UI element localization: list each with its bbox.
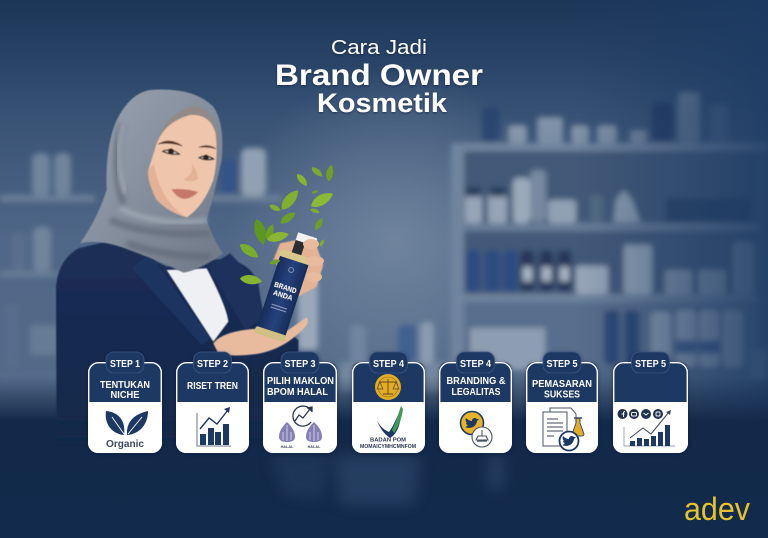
fingers in front of bottle [303,239,324,282]
title: Cara Jadi [331,37,427,59]
icon: halal logos [279,422,322,449]
icon: growth chart [624,410,675,446]
hand behind bottle [273,237,323,297]
panel: step 5 social growth [613,352,688,453]
panel: step 1: TENTUKAN [100,379,150,391]
panel: step 4 BPOM: BADAN POM [370,438,406,444]
panel: step 1: NICHE [110,389,140,401]
icon: circular growth [293,406,312,426]
title: Kosmetik [317,88,448,118]
label: BRAND [273,280,298,296]
panel: step 2: RISET TREN [187,380,238,392]
panel: step 2 [176,352,249,453]
jacket [56,240,298,447]
logo: adev: adev [684,491,750,527]
lips [171,189,198,199]
woman presenting product [56,90,323,447]
icon: BPOM check mark [377,406,403,438]
base [254,326,287,342]
panel: step 4 BPOM [352,352,425,453]
panel: step 3: PILIH MAKLON [267,375,334,387]
icon: flask [572,418,584,436]
panel: step 4 branding: BRANDING & [446,375,506,387]
icon: social media dots [618,409,663,419]
panel: step 5 marketing [526,352,598,453]
panel: step 4 branding: STEP 4 [460,358,491,370]
hijab [80,90,223,273]
white shirt [167,268,228,342]
icon: documents [543,408,576,446]
panel: step 5 marketing: SUKSES [544,388,580,400]
body [257,256,309,337]
eyebrows [158,141,182,146]
panel: step 2: STEP 2 [197,358,228,370]
label: ANDA [272,288,294,303]
panel: step 4 branding: LEGALITAS [452,386,500,398]
panel: step 5 marketing: STEP 5 [546,358,578,370]
panel: step 3: BPOM HALAL [267,386,329,398]
label [271,280,298,303]
eyes [163,150,179,154]
nose [183,163,198,181]
panel: step 3: STEP 3 [284,358,316,370]
title: Brand Owner [275,59,483,92]
panel: step 4 BPOM: STEP 4 [373,358,404,370]
icon: organic leaves [106,411,148,435]
jacket lapels [132,253,263,345]
panel: step 1 [88,352,162,453]
title [275,37,483,118]
gold shoulder [278,249,312,267]
product bottle: Brand Anda [254,229,318,342]
icon: halal logos: HALAL [308,445,321,449]
icon: social bird badge [460,412,484,434]
panel: step 1: Organic [106,438,144,450]
panel: step 3 [263,352,337,453]
face [148,115,217,217]
icon: legal stamp [472,427,492,447]
panel: step 1: STEP 1 [110,358,140,370]
palm [213,317,308,356]
icon: bird badge [560,432,578,450]
panel: step 5 marketing: PEMASARAN [532,378,592,390]
panel: step 4 branding [439,352,512,453]
inner hijab shade [157,106,218,167]
green tea leaves [237,164,335,286]
panel: step 5 social growth: STEP 5 [635,358,666,370]
icon: gold scales seal [375,374,401,400]
pump [291,240,305,258]
panel: step 4 BPOM: MOMAICYMHCMNFOM [360,444,416,450]
icon: halal logos: HALAL [281,445,294,449]
icon: growth bar chart [197,407,231,446]
